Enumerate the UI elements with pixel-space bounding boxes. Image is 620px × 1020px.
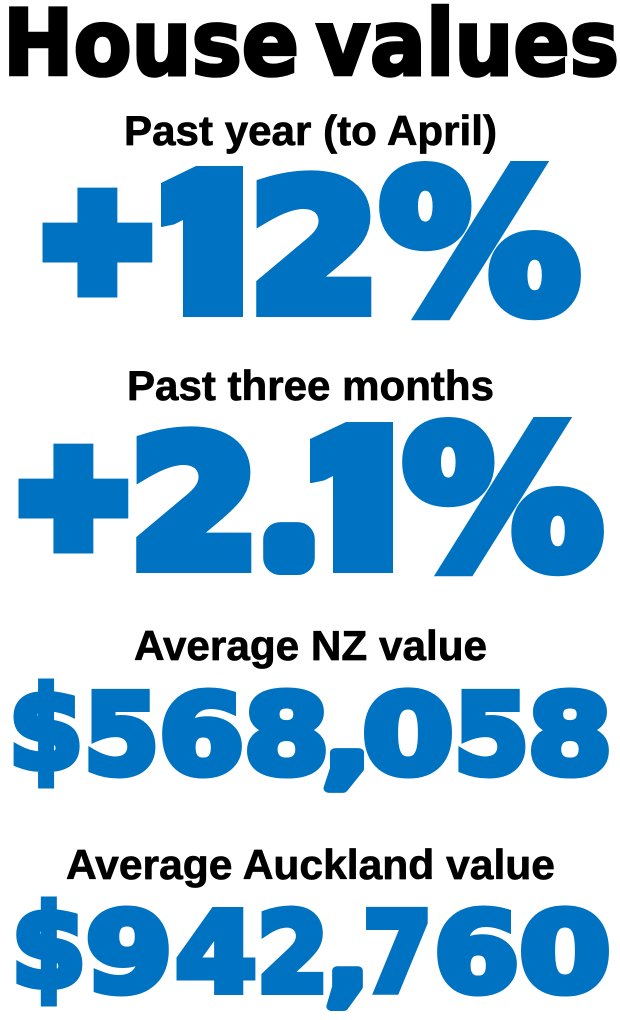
stat: past year change: 1 [148, 146, 270, 351]
stat: past three months change: 1 [298, 402, 420, 607]
stat: average Auckland value: 9 [86, 889, 172, 1017]
stat: average NZ value: 0 [362, 671, 454, 799]
stat: average Auckland value: 7 [363, 889, 432, 1017]
heading: average NZ value: Average NZ value [134, 622, 487, 669]
stat: past three months change: + [16, 416, 131, 574]
stat: past year change: 2 [250, 146, 379, 351]
stat: past year change: + [40, 160, 155, 318]
stat: average NZ value: 8 [528, 671, 612, 799]
heading: past year: Past year (to April) [124, 107, 497, 154]
stat: average Auckland value: 6 [434, 889, 519, 1017]
stat: past three months change: 2 [130, 402, 259, 607]
stat: average Auckland value: 0 [520, 889, 610, 1017]
title [3, 0, 619, 96]
stat: past three months change: % [403, 390, 603, 612]
heading: past three months: Past three months [127, 362, 494, 409]
stat: average Auckland value: 2 [257, 889, 328, 1017]
stat: average NZ value: , [322, 674, 372, 799]
stat: average Auckland value: $ [12, 883, 86, 1013]
stat: past year change [42, 161, 581, 320]
stat: average Auckland value: 4 [176, 889, 256, 1017]
stat: past three months change: . [270, 465, 308, 582]
stat: average NZ value: 6 [159, 671, 244, 799]
stat: past year change: % [380, 134, 580, 356]
stat: average NZ value: $ [9, 665, 83, 795]
stat: average NZ value: 5 [454, 671, 529, 799]
stat: past three months change [18, 417, 604, 576]
stat: average NZ value [9, 665, 612, 799]
heading: average Auckland value: Average Auckland value [66, 841, 555, 888]
stat: average NZ value: 5 [84, 671, 159, 799]
stat: average Auckland value: , [325, 892, 370, 1017]
stat: average Auckland value [12, 883, 610, 1017]
stat: average NZ value: 8 [244, 671, 329, 799]
